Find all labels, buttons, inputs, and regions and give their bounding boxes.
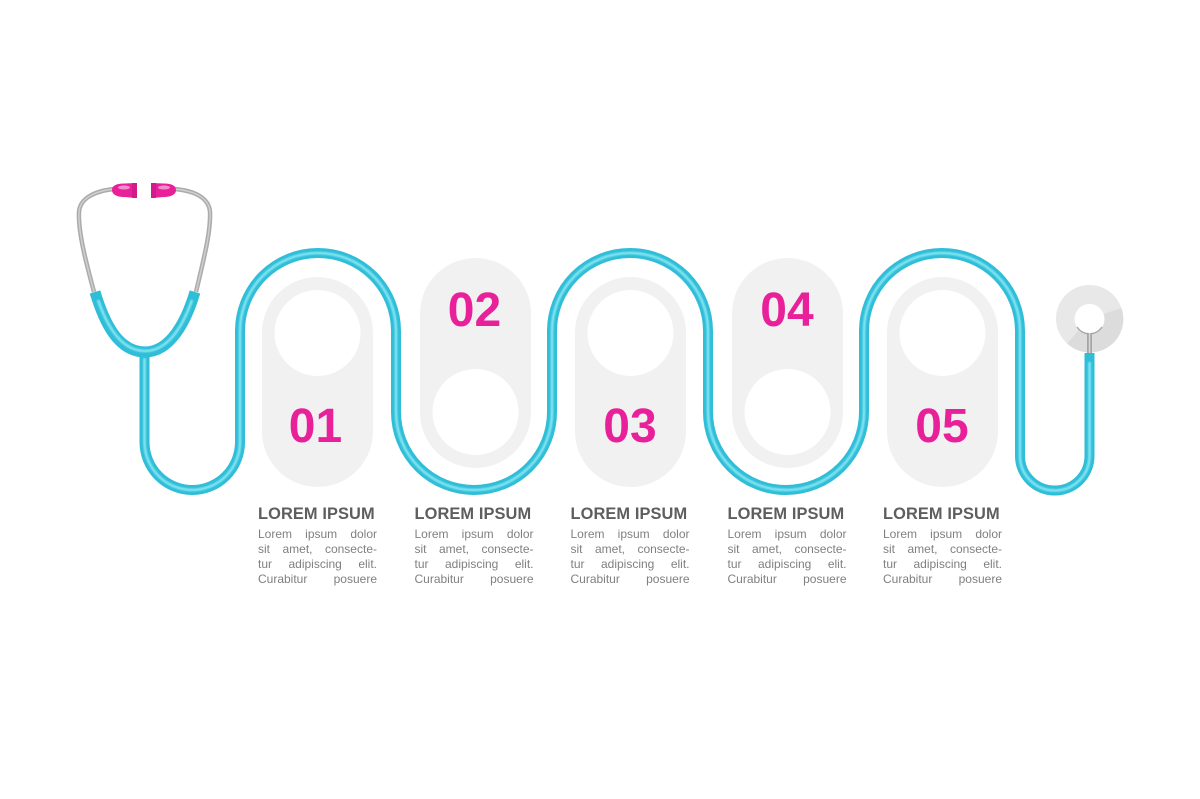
number 04: 04	[760, 284, 814, 337]
panel: step 03 pill	[575, 277, 686, 487]
panel: step 04 pill	[732, 258, 843, 468]
stethoscope tube	[95, 253, 1090, 491]
icon: right ear tip	[151, 183, 176, 198]
icon: left ear tip	[112, 183, 137, 198]
text block: step 03: Curabitur posuere	[570, 572, 690, 586]
text block: step 05: LOREM IPSUM	[883, 505, 1000, 523]
icon: grey metal ear tubes	[79, 189, 210, 292]
text block: step 04: sit amet, consecte-	[728, 542, 846, 556]
text block: step 02: Lorem ipsum dolor	[414, 527, 534, 541]
panel: step 01 pill	[262, 277, 373, 487]
number 02: 02	[448, 284, 501, 337]
text block: step 01: tur adipiscing elit.	[258, 557, 377, 571]
number 01: 01	[289, 400, 342, 453]
text block: step 02: Curabitur posuere	[414, 572, 534, 586]
text block: step 05: Curabitur posuere	[883, 572, 1002, 586]
text block: step 02: LOREM IPSUM	[414, 505, 531, 523]
panel: step 05 pill	[887, 277, 998, 487]
text block: step 01: sit amet, consecte-	[258, 542, 377, 556]
text block: step 03: tur adipiscing elit.	[570, 557, 690, 571]
text block: step 03: LOREM IPSUM	[570, 505, 687, 523]
text block: step 04: Curabitur posuere	[728, 572, 846, 586]
text block: step 04	[728, 505, 846, 586]
number 05: 05	[915, 400, 969, 453]
text block: step 02: sit amet, consecte-	[414, 542, 534, 556]
text block: step 03	[570, 505, 690, 586]
text block: step 05: Lorem ipsum dolor	[883, 527, 1002, 541]
panel: step 02 pill	[420, 258, 531, 468]
text block: step 01: LOREM IPSUM	[258, 505, 375, 523]
text block: step 02: tur adipiscing elit.	[414, 557, 534, 571]
icon: chest piece	[1056, 285, 1123, 353]
text block: step 05: tur adipiscing elit.	[883, 557, 1002, 571]
text block: step 02	[414, 505, 534, 586]
text block: step 04: Lorem ipsum dolor	[728, 527, 846, 541]
text block: step 04: LOREM IPSUM	[728, 505, 844, 523]
text block: step 03: Lorem ipsum dolor	[570, 527, 690, 541]
text block: step 05: sit amet, consecte-	[883, 542, 1002, 556]
text block: step 01	[258, 505, 377, 586]
text block: step 03: sit amet, consecte-	[570, 542, 690, 556]
text block: step 04: tur adipiscing elit.	[728, 557, 846, 571]
text block: step 05	[883, 505, 1002, 586]
icon: Y yoke	[95, 292, 195, 352]
text block: step 01: Curabitur posuere	[258, 572, 377, 586]
number 03: 03	[603, 400, 657, 453]
text block: step 01: Lorem ipsum dolor	[258, 527, 377, 541]
